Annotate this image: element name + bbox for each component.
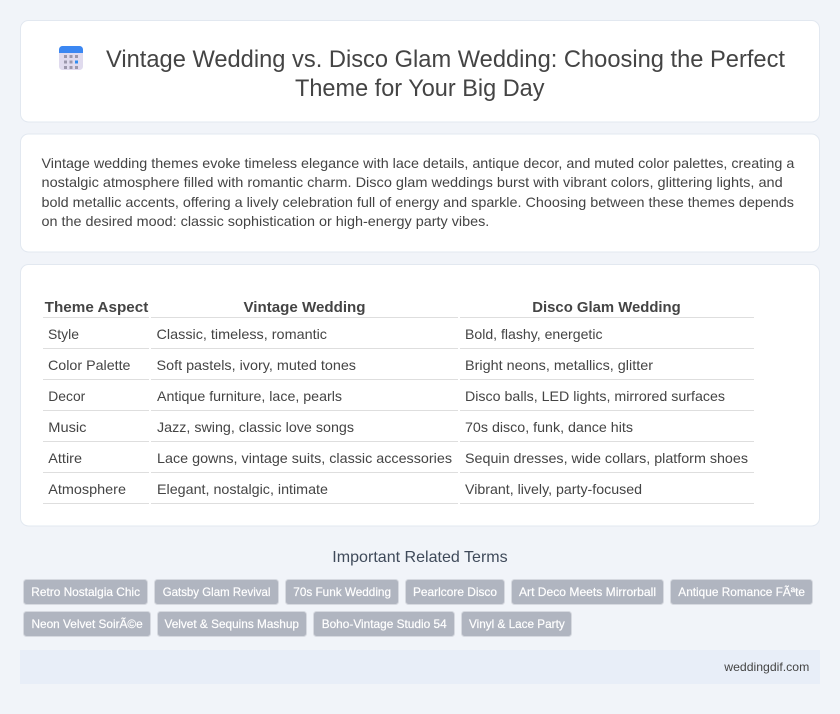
table row: decor: Decor: [48, 388, 86, 404]
tag: [24, 580, 148, 604]
tag: [462, 612, 572, 636]
table row: music: 70s disco, funk, dance hits: [465, 419, 633, 435]
tag: Art Deco Meets Mirrorball: [519, 585, 656, 599]
table row: decor: [48, 388, 725, 404]
footer bar: [20, 650, 820, 684]
table row: decor: Antique furniture, lace, pearls: [157, 388, 342, 404]
tag: [314, 612, 454, 636]
table row: style: Classic, timeless, romantic: [156, 326, 327, 342]
tag: Retro Nostalgia Chic: [31, 585, 140, 599]
table row: color palette: [48, 357, 653, 373]
table row: music: Jazz, swing, classic love songs: [157, 419, 354, 435]
table row: atmosphere: [48, 481, 642, 497]
table row: style: Bold, flashy, energetic: [465, 326, 602, 342]
table row: style: Style: [48, 326, 79, 342]
table row: attire: [48, 450, 748, 466]
table row: color palette: Bright neons, metallics, glitter: [465, 357, 653, 373]
table header row: [45, 300, 681, 316]
heading: related terms: Important Related Terms: [332, 549, 508, 566]
panel: header: [20, 20, 820, 122]
related term tags: [24, 580, 812, 636]
table row: attire: Attire: [48, 450, 82, 466]
tag: [158, 612, 306, 636]
tag: [154, 580, 278, 604]
table row: atmosphere: Vibrant, lively, party-focused: [465, 481, 642, 497]
tag: Gatsby Glam Revival: [163, 585, 270, 599]
tag: Neon Velvet SoirÃ©e: [32, 617, 143, 631]
table header row: Theme Aspect: [45, 300, 148, 316]
tag: Velvet & Sequins Mashup: [164, 617, 299, 631]
table row: attire: Sequin dresses, wide collars, platform shoes: [465, 450, 748, 466]
table row: color palette: Soft pastels, ivory, muted tones: [156, 357, 356, 373]
tag: Pearlcore Disco: [413, 585, 497, 599]
table row: style: [48, 326, 602, 342]
panel: comparison table: [20, 264, 820, 526]
table row: atmosphere: Atmosphere: [48, 481, 126, 497]
table row: decor: Disco balls, LED lights, mirrored surfaces: [465, 388, 725, 404]
title: [106, 46, 785, 102]
table row: atmosphere: Elegant, nostalgic, intimate: [157, 481, 328, 497]
tag: Vinyl & Lace Party: [469, 617, 565, 631]
panel: intro text: nostalgic atmosphere filled with romantic charm. Disco glam weddings burst with vibrant colors, glittering lights, and: [42, 174, 783, 190]
title: Vintage Wedding vs. Disco Glam Wedding: Choosing the Perfect: [106, 46, 785, 73]
table row: music: [48, 419, 633, 435]
tag: [670, 580, 812, 604]
tag: [406, 580, 504, 604]
tag: Boho-Vintage Studio 54: [322, 617, 447, 631]
table row: attire: Lace gowns, vintage suits, classic accessories: [157, 450, 452, 466]
tag: [286, 580, 398, 604]
panel: intro text: [20, 134, 820, 252]
tag: 70s Funk Wedding: [293, 585, 391, 599]
table header row: Vintage Wedding: [244, 300, 366, 316]
table row: color palette: Color Palette: [48, 357, 131, 373]
panel: intro text: Vintage wedding themes evoke timeless elegance with lace details, antique decor, and muted color palettes, creating a: [42, 155, 795, 171]
tag: [24, 612, 150, 636]
tag: [512, 580, 664, 604]
panel: intro text: on the desired mood: classic sophistication or high-energy party vibes.: [42, 213, 489, 229]
footer bar: weddingdif.com: [723, 660, 809, 674]
title: Theme for Your Big Day: [295, 75, 544, 102]
table row: music: Music: [48, 419, 86, 435]
panel: intro text: bold metallic accents, offering a lively celebration full of energy and sparkle. Choosing between these themes depends: [42, 194, 794, 210]
tag: Antique Romance FÃªte: [678, 585, 805, 599]
icon: calendar: [59, 46, 83, 70]
table header row: Disco Glam Wedding: [532, 300, 681, 316]
